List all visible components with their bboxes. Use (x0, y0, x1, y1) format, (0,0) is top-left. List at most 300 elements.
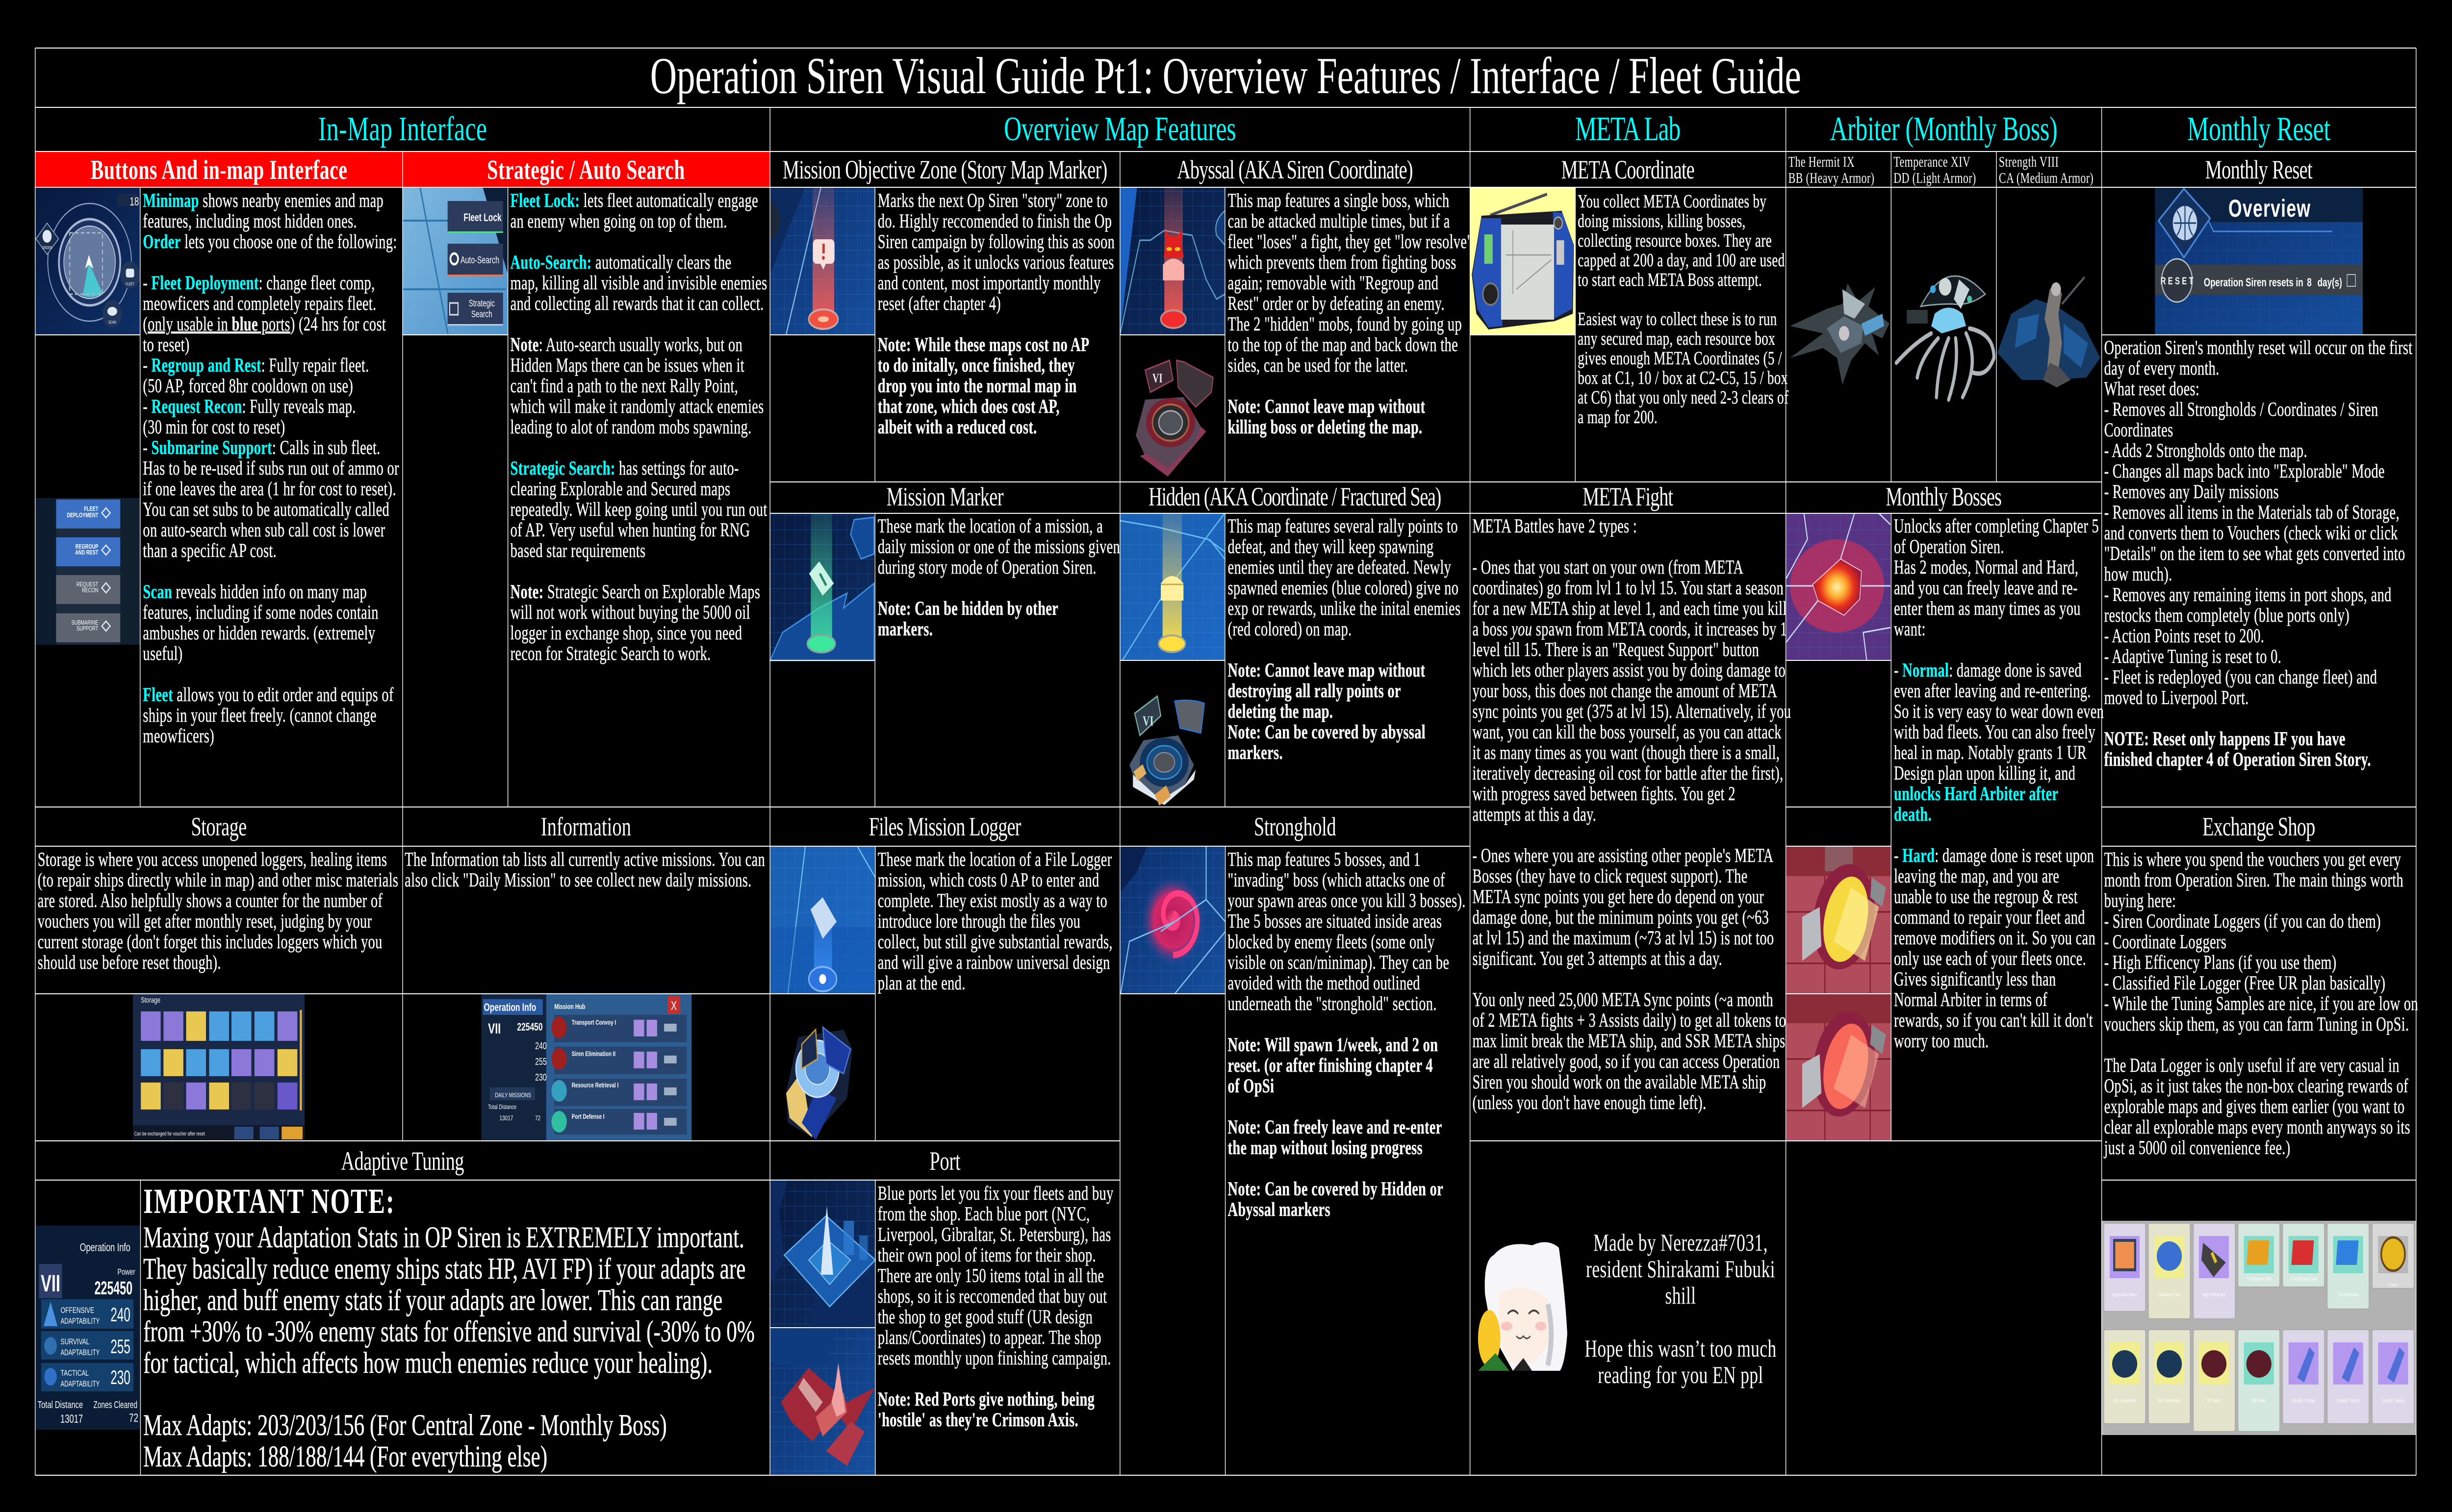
text: monthly bosses: unable to use the regroup & rest (1894, 885, 2078, 907)
text: buttons description: meowficers) (143, 725, 214, 747)
image: order buttons: SUPPORT (77, 626, 99, 632)
image: Strength boss (1997, 277, 2100, 387)
image: exchange shop items: High-Efficiency (2202, 1292, 2226, 1297)
image: order buttons (35, 498, 140, 645)
text: mission objective zone: reset (after chapter 4) (878, 292, 1001, 314)
text: buttons description: on auto-search when sub call cost is lower (143, 519, 385, 541)
text: monthly reset description: day of every month. (2104, 357, 2220, 379)
panel: adaptive tuning (35, 1147, 755, 1473)
text: abyssal: fleet "loses" a fight, they get "low resolve" (1228, 230, 1473, 252)
image: operation info stats: Total Distance (38, 1399, 83, 1411)
text: monthly reset description: Coordinates (2104, 419, 2173, 441)
image: information screen: 240 (535, 1040, 547, 1052)
image: file logger marker (770, 847, 875, 994)
text: mission objective zone: and content, most importantly monthly (878, 272, 1101, 294)
text: META fight: are all relatively good, so if you can access Operation (1473, 1050, 1780, 1072)
text: storage: Storage is where you access unopened loggers, healing items (38, 848, 387, 870)
text: strategic description: lets fleet automatically engage (584, 189, 758, 211)
text: strategic description: Fleet Lock: (511, 189, 580, 211)
text: monthly bosses: - Hard: damage done is reset upon (1894, 844, 2094, 866)
text: exchange shop: - High Efficency Plans (if you use them) (2104, 951, 2337, 973)
text: hidden: exp or rewards, unlike the inital enemies (1228, 597, 1460, 619)
text: exchange shop: vouchers skip them, as you can farm Tuning in OpSi. (2104, 1013, 2409, 1035)
text: credits: Made by Nerezza#7031, (1593, 1229, 1768, 1257)
text: stronghold: "invading" boss (which attacks one of (1228, 869, 1445, 891)
text: abyssal: Note: Cannot leave map without (1228, 395, 1425, 417)
text: META fight: with progress saved between fights. You get 2 (1473, 782, 1736, 805)
panel: buttons and in-map interface (35, 151, 403, 747)
image: information screen: Mission Hub (554, 1002, 586, 1010)
text: mission objective zone: as possible, as it unlocks various features (878, 251, 1114, 273)
text: strategic description: repeatedly. Will keep going until you run out (511, 498, 767, 520)
text: abyssal: The 2 "hidden" mobs, found by going up (1228, 313, 1462, 335)
heading: port: Port (929, 1147, 961, 1176)
image: information screen (482, 994, 691, 1141)
text: adaptive tuning explanation: They basically reduce enemy ships stats HP, AVI FP) if your adapts are (143, 1253, 745, 1285)
image: search buttons: Auto-Search (460, 254, 499, 266)
section heading: META Lab: META Lab (1575, 110, 1681, 148)
image: information screen: DAILY MISSIONS (495, 1092, 531, 1099)
text: strategic description: which will make it randomly attack enemies (511, 395, 764, 417)
text: stronghold: avoided with the method outlined (1228, 972, 1420, 994)
text: buttons description: if one leaves the area (1 hr for cost to reset). (143, 478, 396, 500)
text: credits: Hope this wasn’t too much (1584, 1335, 1776, 1362)
image: red vortex (1786, 513, 1890, 660)
text: monthly bosses: worry too much. (1894, 1030, 1989, 1052)
text: abyssal: which prevents them from fighting boss (1228, 251, 1456, 273)
text: abyssal: to the top of the map and back down the (1228, 333, 1458, 355)
text: monthly reset description: - Removes all Strongholds / Coordinates / Siren (2104, 398, 2378, 420)
text: buttons description: - Fleet Deployment: change fleet comp, (143, 272, 375, 294)
text: monthly bosses: Has 2 modes, Normal and Hard, (1894, 556, 2078, 578)
image: exchange shop items: R5 Siren (2207, 1398, 2221, 1403)
text: monthly bosses: death. (1894, 803, 1932, 825)
title: Operation Siren Visual Guide Pt1: Overview Features / Interface / Fleet Guide (650, 47, 1801, 104)
text: abyssal: Rest" order or by defeating an enemy. (1228, 292, 1445, 314)
text: strategic description: logger in exchange shop, since you need (511, 622, 742, 644)
panel: exchange shop (2102, 812, 2418, 1435)
text: buttons description: ships in your fleet freely. (cannot change (143, 704, 377, 726)
text: hidden: destroying all rally points or (1228, 680, 1401, 702)
text: monthly bosses: heal in map. Notably grants 1 UR (1894, 741, 2087, 763)
heading: information: Information (541, 812, 631, 842)
panel: files mission logger (770, 812, 1113, 1140)
text: files mission logger: These mark the location of a File Logger (878, 848, 1112, 870)
section heading: Arbiter: Arbiter (Monthly Boss) (1830, 110, 2058, 148)
heading: META coordinate: META Coordinate (1561, 155, 1695, 185)
text: files mission logger: and will give a rainbow universal design (878, 951, 1110, 973)
text: META fight: significant. You get 3 attempts at this a day. (1473, 947, 1722, 969)
text: port: their own pool of items for their shop. (878, 1244, 1096, 1266)
text: stronghold: The 5 bosses are situated inside areas (1228, 910, 1442, 932)
panel: stronghold (1120, 812, 1466, 1220)
text: mission marker: Note: Can be hidden by other (878, 597, 1058, 619)
heading: monthly bosses: Monthly Bosses (1886, 482, 2002, 512)
text: storage: current storage (don't forget this includes loggers which you (38, 931, 383, 953)
text: adaptive tuning explanation: higher, and buff enemy stats if your adapts are lower. This can range (143, 1284, 722, 1317)
text: META fight: max limit break the META ship, and SSR META ships (1473, 1030, 1786, 1052)
text: buttons description: Minimap (143, 189, 199, 211)
panel: META coordinate (1470, 155, 1789, 428)
image: exchange shop items: R6 Siren (2252, 1398, 2266, 1403)
text: mission objective zone: Siren campaign by following this as soon (878, 230, 1115, 252)
text: port: the shop to get good stuff (UR design (878, 1306, 1093, 1328)
heading: META fight: META Fight (1583, 482, 1673, 512)
text: exchange shop: - Classified File Logger (Free UR plan basically) (2104, 972, 2385, 994)
image: operation info stats: 225450 (95, 1277, 132, 1298)
text: monthly reset description: - Action Points reset to 200. (2104, 625, 2264, 647)
text: META coordinate: Easiest way to collect these is to run (1578, 309, 1777, 329)
text: META fight: want, you can kill the boss yourself, as you can attack (1473, 721, 1782, 743)
text: monthly reset description: restocks them completely (blue ports only) (2104, 604, 2350, 626)
label: Strength: Strength VIII (1999, 153, 2059, 170)
image: information screen: Transport Convoy I (572, 1018, 616, 1026)
text: META fight: META sync points you get here do depend on your (1473, 885, 1764, 907)
image: operation info stats: 13017 (60, 1412, 83, 1426)
heading: mission marker: Mission Marker (887, 482, 1004, 512)
text: buttons description: features, including if some nodes contain (143, 601, 379, 623)
image: exchange shop items: R6 Coordinate (2158, 1398, 2181, 1403)
image: information screen: Port Defense I (572, 1112, 605, 1120)
image: information screen: 13017 (500, 1114, 513, 1122)
icon: classified file logger (786, 1027, 852, 1140)
image: operation info stats: 240 (110, 1304, 130, 1326)
icon: siren coordinate logger: VI (1152, 371, 1163, 385)
text: exchange shop: clear all explorable maps every month anyways so its (2104, 1116, 2410, 1138)
text: monthly bosses: even after leaving and re-entering. (1894, 680, 2091, 702)
text: information: The Information tab lists all currently active missions. You can (405, 848, 765, 870)
text: adaptive tuning explanation: from +30% to -30% enemy stats for offensive and survival (-30% to 0% (143, 1315, 755, 1348)
text: adaptive tuning explanation: Max Adapts: 203/203/156 (For Central Zone - Monthly Boss) (143, 1409, 667, 1442)
text: hidden: Note: Can be covered by abyssal (1228, 721, 1426, 743)
image: abyssal marker (1120, 187, 1225, 335)
text: stronghold: blocked by enemy fleets (some only (1228, 931, 1435, 953)
label: Temperance: DD (Light Armor) (1893, 169, 1976, 186)
text: buttons description: ambushes or hidden rewards. (extremely (143, 622, 376, 644)
panel: META fight (1473, 482, 1791, 1113)
text: monthly reset description: - Removes any remaining items in port shops, and (2104, 583, 2392, 605)
text: information: also click "Daily Mission" to see collect new daily missions. (405, 869, 752, 891)
image: operation info stats: Operation Info (80, 1241, 130, 1254)
image: minimap: FLEET (126, 282, 135, 286)
image: yellow hidden marker (1120, 513, 1225, 660)
image: operation info stats: 230 (110, 1367, 130, 1388)
heading: mission objective zone: Mission Objective Zone (Story Map Marker) (783, 155, 1107, 185)
text: META fight: for a new META ship at level 1, and each time you kill (1473, 597, 1787, 619)
icon: coordinate logger (1129, 696, 1204, 806)
image: order buttons: DEPLOYMENT (67, 512, 99, 519)
image: information screen: VII (488, 1020, 501, 1037)
text: META fight: it as many times as you want (though there is a small, (1473, 741, 1780, 763)
text: buttons description: Fleet allows you to edit order and equips of (143, 683, 394, 706)
text: exchange shop: This is where you spend the vouchers you get every (2104, 848, 2401, 870)
image: operation info stats: Power (118, 1267, 135, 1277)
text: exchange shop: - While the Tuning Samples are nice, if you are low on (2104, 992, 2418, 1014)
heading: adaptive tuning: Adaptive Tuning (341, 1147, 464, 1176)
text: META fight: You only need 25,000 META Sync points (~a month (1473, 988, 1773, 1010)
image: Fubuki chibi (1478, 1242, 1567, 1371)
text: strategic description: Hidden Maps there can be issues when it (511, 354, 744, 376)
text: strategic description: of AP. Very useful when hunting for RNG (511, 519, 750, 541)
text: monthly bosses: unlocks Hard Arbiter after (1894, 782, 2058, 805)
text: adaptive tuning explanation: for tactical, which affects how much enemies reduce your healing). (143, 1347, 713, 1380)
image: operation info stats: Zones Cleared (94, 1399, 137, 1411)
text: monthly bosses: only use each of your fleets once. (1894, 947, 2086, 969)
text: exchange shop: explorable maps and gives them earlier (you want to (2104, 1095, 2405, 1117)
image: minimap (35, 187, 140, 335)
image: information screen: 72 (535, 1114, 540, 1122)
text: hidden: markers. (1228, 741, 1283, 763)
text: strategic description: recon for Strategic Search to work. (511, 642, 711, 664)
image: green mission marker (770, 513, 874, 660)
image: order buttons: RECON (82, 587, 98, 594)
image: monthly reset banner: Overview (2228, 195, 2310, 223)
text: META fight: Siren you should work on the available META ship (1473, 1071, 1766, 1093)
image: exchange shop items: Coins (2389, 1282, 2398, 1287)
image: exchange shop items: Quality Tuning (2293, 1398, 2315, 1403)
image: storage screen (133, 994, 305, 1141)
text: buttons description: (only usable in blue ports) (24 hrs for cost (143, 313, 386, 335)
image: operation info stats: ADAPTABILITY (61, 1317, 100, 1326)
image: minimap: 18 (129, 195, 139, 208)
image: red port (770, 1328, 875, 1475)
image: monthly reset banner: 8 (2307, 276, 2312, 289)
text: monthly bosses: remove modifiers on it. So you can (1894, 927, 2095, 949)
heading band: strategic (403, 151, 770, 187)
text: stronghold: Abyssal markers (1228, 1198, 1330, 1220)
text: stronghold: This map features 5 bosses, and 1 (1228, 848, 1421, 870)
text: mission objective zone: that zone, which does cost AP, (878, 395, 1060, 417)
panel: monthly reset (2104, 155, 2412, 770)
text: monthly bosses: rewards, so if you can't kill it don't (1894, 1009, 2093, 1031)
image: arbiter normal machine (1786, 847, 1891, 994)
text: exchange shop: - Coordinate Loggers (2104, 931, 2226, 953)
text: stronghold: Note: Can freely leave and re-enter (1228, 1116, 1442, 1138)
text: META coordinate: doing missions, killing bosses, (1578, 211, 1746, 231)
image: stronghold vortex (1120, 847, 1226, 994)
text: monthly reset description: NOTE: Reset only happens IF you have (2104, 728, 2346, 750)
text: storage: (to repair ships directly while in map) and other misc materials (38, 869, 398, 891)
text: port: shops, so it is reccomended that buy out (878, 1285, 1107, 1307)
text: monthly reset description: finished chapter 4 of Operation Siren Story. (2104, 748, 2371, 770)
text: stronghold: your spawn areas once you kill 3 bosses). (1228, 889, 1466, 911)
text: storage: are stored. Also helpfully shows a counter for the number of (38, 889, 383, 911)
text: abyssal: This map features a single boss, which (1228, 189, 1449, 211)
panel: mission marker (770, 482, 1120, 660)
text: strategic description: map, killing all visible and invisible enemies (511, 272, 767, 294)
heading: hidden: Hidden (AKA Coordinate / Fractured Sea) (1149, 482, 1441, 512)
text: META fight: your boss, this does not change the amount of META (1473, 680, 1777, 702)
image: information screen: Resource Retrieval I (572, 1081, 618, 1089)
text: port: Note: Red Ports give nothing, being (878, 1388, 1095, 1410)
panel: storage (38, 812, 398, 1141)
text: monthly bosses: Design plan upon killing it, and (1894, 762, 2075, 784)
text: monthly reset description: - Fleet is redeployed (you can change fleet) and (2104, 666, 2377, 688)
text: META fight: which lets other players assist you by doing damage to (1473, 659, 1786, 681)
text: monthly bosses: and you can freely leave and re- (1894, 577, 2078, 599)
text: strategic description: based star requirements (511, 539, 645, 561)
text: monthly bosses: Unlocks after completing Chapter 5 (1894, 515, 2099, 537)
text: hidden: (red colored) on map. (1228, 618, 1352, 640)
panel: mission objective zone (770, 155, 1115, 438)
text: exchange shop: OpSi, as it just takes the non-box clearing rewards of (2104, 1075, 2408, 1097)
image: monthly reset banner (2155, 188, 2363, 334)
text: buttons description: shows nearby enemies and map (203, 189, 383, 211)
icon: siren coordinate logger (1136, 360, 1213, 477)
text: adaptive tuning explanation: Maxing your Adaptation Stats in OP Siren is EXTREMELY important. (143, 1221, 744, 1254)
image: operation info stats: TACTICAL (61, 1369, 89, 1378)
text: strategic description: Strategic Search: has settings for auto- (511, 457, 739, 479)
text: META coordinate: collecting resource boxes. They are (1578, 230, 1772, 251)
image: exchange shop items: Quality Tuning (2382, 1398, 2404, 1403)
text: monthly reset description: how much). (2104, 563, 2172, 585)
text: port: Blue ports let you fix your fleets and buy (878, 1182, 1114, 1204)
text: strategic description: clearing Explorable and Secured maps (511, 478, 730, 500)
text: mission objective zone: Marks the next Op Siren "story" zone to (878, 189, 1108, 211)
text: files mission logger: complete. They exist mostly as a way to (878, 889, 1107, 911)
text: stronghold: Note: Will spawn 1/week, and 2 on (1228, 1033, 1438, 1056)
text: abyssal: sides, can be used for the latter. (1228, 354, 1408, 376)
panel: arbiter bosses (1788, 153, 2100, 400)
panel: hidden (1120, 482, 1460, 806)
text: stronghold: visible on scan/minimap). They can be (1228, 951, 1449, 973)
text: META fight: coordinates) go from lvl 1 to lvl 15. You start a season (1473, 577, 1784, 599)
text: credits: reading for you EN ppl (1598, 1361, 1763, 1389)
image: blue port (770, 1180, 875, 1328)
text: storage: should use before reset though). (38, 951, 221, 973)
heading: monthly reset: Monthly Reset (2205, 155, 2313, 185)
text: META fight: META Battles have 2 types : (1473, 515, 1637, 537)
text: monthly bosses: of Operation Siren. (1894, 535, 2004, 557)
text: META fight: level till 15. There is an "Request Support" button (1473, 638, 1759, 660)
image: information screen: X (671, 999, 677, 1013)
image: monthly reset banner: RESET (2161, 276, 2196, 287)
text: monthly reset description: - Adds 2 Strongholds onto the map. (2104, 439, 2307, 461)
image: order buttons: REQUEST (77, 581, 99, 588)
image: exchange shop items: Operation Siren (2113, 1292, 2137, 1297)
image: operation info stats: OFFENSIVE (61, 1306, 94, 1315)
text: files mission logger: introduce lore through the files you (878, 910, 1080, 932)
text: buttons description: - Regroup and Rest: Fully repair fleet. (143, 354, 369, 376)
section heading: Overview Map Features: Overview Map Features (1004, 110, 1236, 148)
text: exchange shop: just a 5000 oil convenience fee.) (2104, 1136, 2290, 1159)
text: files mission logger: mission, which costs 0 AP to enter and (878, 869, 1099, 891)
text: mission marker: markers. (878, 618, 933, 640)
image: red story marker (770, 187, 875, 335)
text: strategic description: Auto-Search: automatically clears the (511, 251, 732, 273)
image: search buttons: Strategic (469, 299, 495, 309)
text: exchange shop: month from Operation Siren. The main things worth (2104, 869, 2403, 891)
text: buttons description: You can set subs to be automatically called (143, 498, 389, 520)
text: monthly reset description: and converts them to Vouchers (check wiki or click (2104, 522, 2398, 544)
panel: abyssal (1120, 155, 1473, 477)
text: strategic description: leading to alot of random mobs spawning. (511, 416, 752, 438)
text: buttons description: Scan reveals hidden info on many map (143, 580, 367, 603)
section heading: Monthly Reset: Monthly Reset (2187, 110, 2330, 148)
image: exchange shop items: R5 Coordinate (2114, 1398, 2136, 1403)
icon: coordinate logger: VI (1143, 714, 1153, 729)
panel: monthly bosses (1786, 482, 2104, 1141)
text: hidden: enemies until they are defeated. Newly (1228, 556, 1451, 578)
text: exchange shop: buying here: (2104, 889, 2176, 911)
text: monthly reset description: moved to Liverpool Port. (2104, 686, 2249, 708)
image: exchange shop items: T4 Support Skill (2247, 1276, 2271, 1282)
text: important note: IMPORTANT NOTE: (143, 1181, 394, 1221)
text: META coordinate: You collect META Coordinates by (1578, 191, 1766, 212)
text: stronghold: Note: Can be covered by Hidden or (1228, 1178, 1443, 1200)
text: stronghold: reset. (or after finishing chapter 4 (1228, 1054, 1433, 1076)
text: META fight: Bosses (they have to click request support). The (1473, 865, 1748, 887)
heading band: buttons: Buttons And in-map Interface (91, 154, 347, 185)
image: Hermit boss (1790, 283, 1890, 385)
text: monthly bosses: leaving the map, and you are (1894, 865, 2059, 887)
text: META coordinate: capped at 200 a day, and 100 are used (1578, 250, 1785, 271)
image: search buttons (403, 187, 508, 334)
text: META fight: attempts at this a day. (1473, 803, 1596, 825)
text: mission marker: These mark the location of a mission, a (878, 515, 1103, 537)
text: files mission logger: plan at the end. (878, 972, 966, 994)
text: port: from the shop. Each blue port (NYC, (878, 1203, 1090, 1225)
image: exchange shop items: Quality Tuning (2337, 1398, 2359, 1403)
text: buttons description: meowficers and completely repairs fleet. (143, 292, 376, 314)
text: strategic description: Note: Auto-search usually works, but on (511, 333, 742, 355)
text: monthly bosses: So it is very easy to wear down even (1894, 700, 2104, 722)
heading: storage: Storage (191, 812, 247, 842)
text: hidden: spawned enemies (blue colored) give no (1228, 577, 1458, 599)
image: operation info stats: 72 (129, 1411, 138, 1425)
text: buttons description: Has to be re-used if subs run out of ammo or (143, 457, 399, 479)
image: information screen: 225450 (517, 1022, 543, 1033)
image: order buttons: AND REST (75, 550, 99, 556)
text: port: There are only 150 items total in all the (878, 1264, 1104, 1286)
text: META fight: sync points you get (375 at lvl 15). Alternatively, if you (1473, 700, 1791, 722)
text: port: 'hostile' as they're Crimson Axis. (878, 1409, 1078, 1431)
image: order buttons: SUBMARINE (72, 620, 99, 626)
text: buttons description: (50 AP, forced 8hr cooldown on use) (143, 375, 353, 397)
text: META coordinate: at C6) that you only need 2-3 clears of (1578, 387, 1789, 408)
text: META fight: at lvl 15) and the maximum (~73 at lvl 15) is not too (1473, 927, 1774, 949)
text: abyssal: killing boss or deleting the map. (1228, 416, 1422, 438)
image: exchange shop items (2102, 1221, 2416, 1435)
text: buttons description: useful) (143, 642, 183, 664)
image: storage screen: Storage (141, 995, 160, 1004)
text: strategic description: can't find a path to the next Rally Point, (511, 375, 738, 397)
image: information screen: 230 (535, 1072, 547, 1083)
text: META fight: of 2 META fights + 3 Assists daily) to get all tokens to (1473, 1009, 1786, 1031)
panel: credits (1478, 1229, 1776, 1389)
text: mission objective zone: to do initally, once finished, they (878, 354, 1075, 376)
image: META device (1470, 187, 1575, 335)
text: monthly bosses: with bad fleets. You can also freely (1894, 721, 2095, 743)
text: mission objective zone: Note: While these maps cost no AP (878, 333, 1089, 355)
text: buttons description: features, including most hidden ones. (143, 210, 357, 232)
text: buttons description: (30 min for cost to reset) (143, 416, 285, 438)
text: mission objective zone: do. Highly reccomended to finish the Op (878, 210, 1112, 232)
image: operation info stats: SURVIVAL (61, 1337, 89, 1347)
text: stronghold: the map without losing progress (1228, 1136, 1423, 1159)
text: credits: resident Shirakami Fubuki (1586, 1256, 1775, 1283)
text: port: resets monthly upon finishing campaign. (878, 1347, 1111, 1369)
text: exchange shop: - Siren Coordinate Loggers (if you can do them) (2104, 910, 2381, 932)
image: order buttons: REGROUP (76, 544, 99, 550)
text: META coordinate: to start each META Boss attempt. (1578, 270, 1762, 290)
text: monthly reset description: - Removes any Daily missions (2104, 480, 2279, 503)
text: monthly reset description: - Removes all items in the Materials tab of Storage, (2104, 501, 2400, 523)
image: monthly reset banner: Operation Siren resets in (2204, 276, 2303, 289)
text: adaptive tuning explanation: Max Adapts: 188/188/144 (For everything else) (143, 1440, 547, 1473)
label: The Hermit: BB (Heavy Armor) (1788, 169, 1874, 186)
text: META coordinate: box at C1, 10 / box at C2-C5, 15 / box (1578, 368, 1788, 388)
